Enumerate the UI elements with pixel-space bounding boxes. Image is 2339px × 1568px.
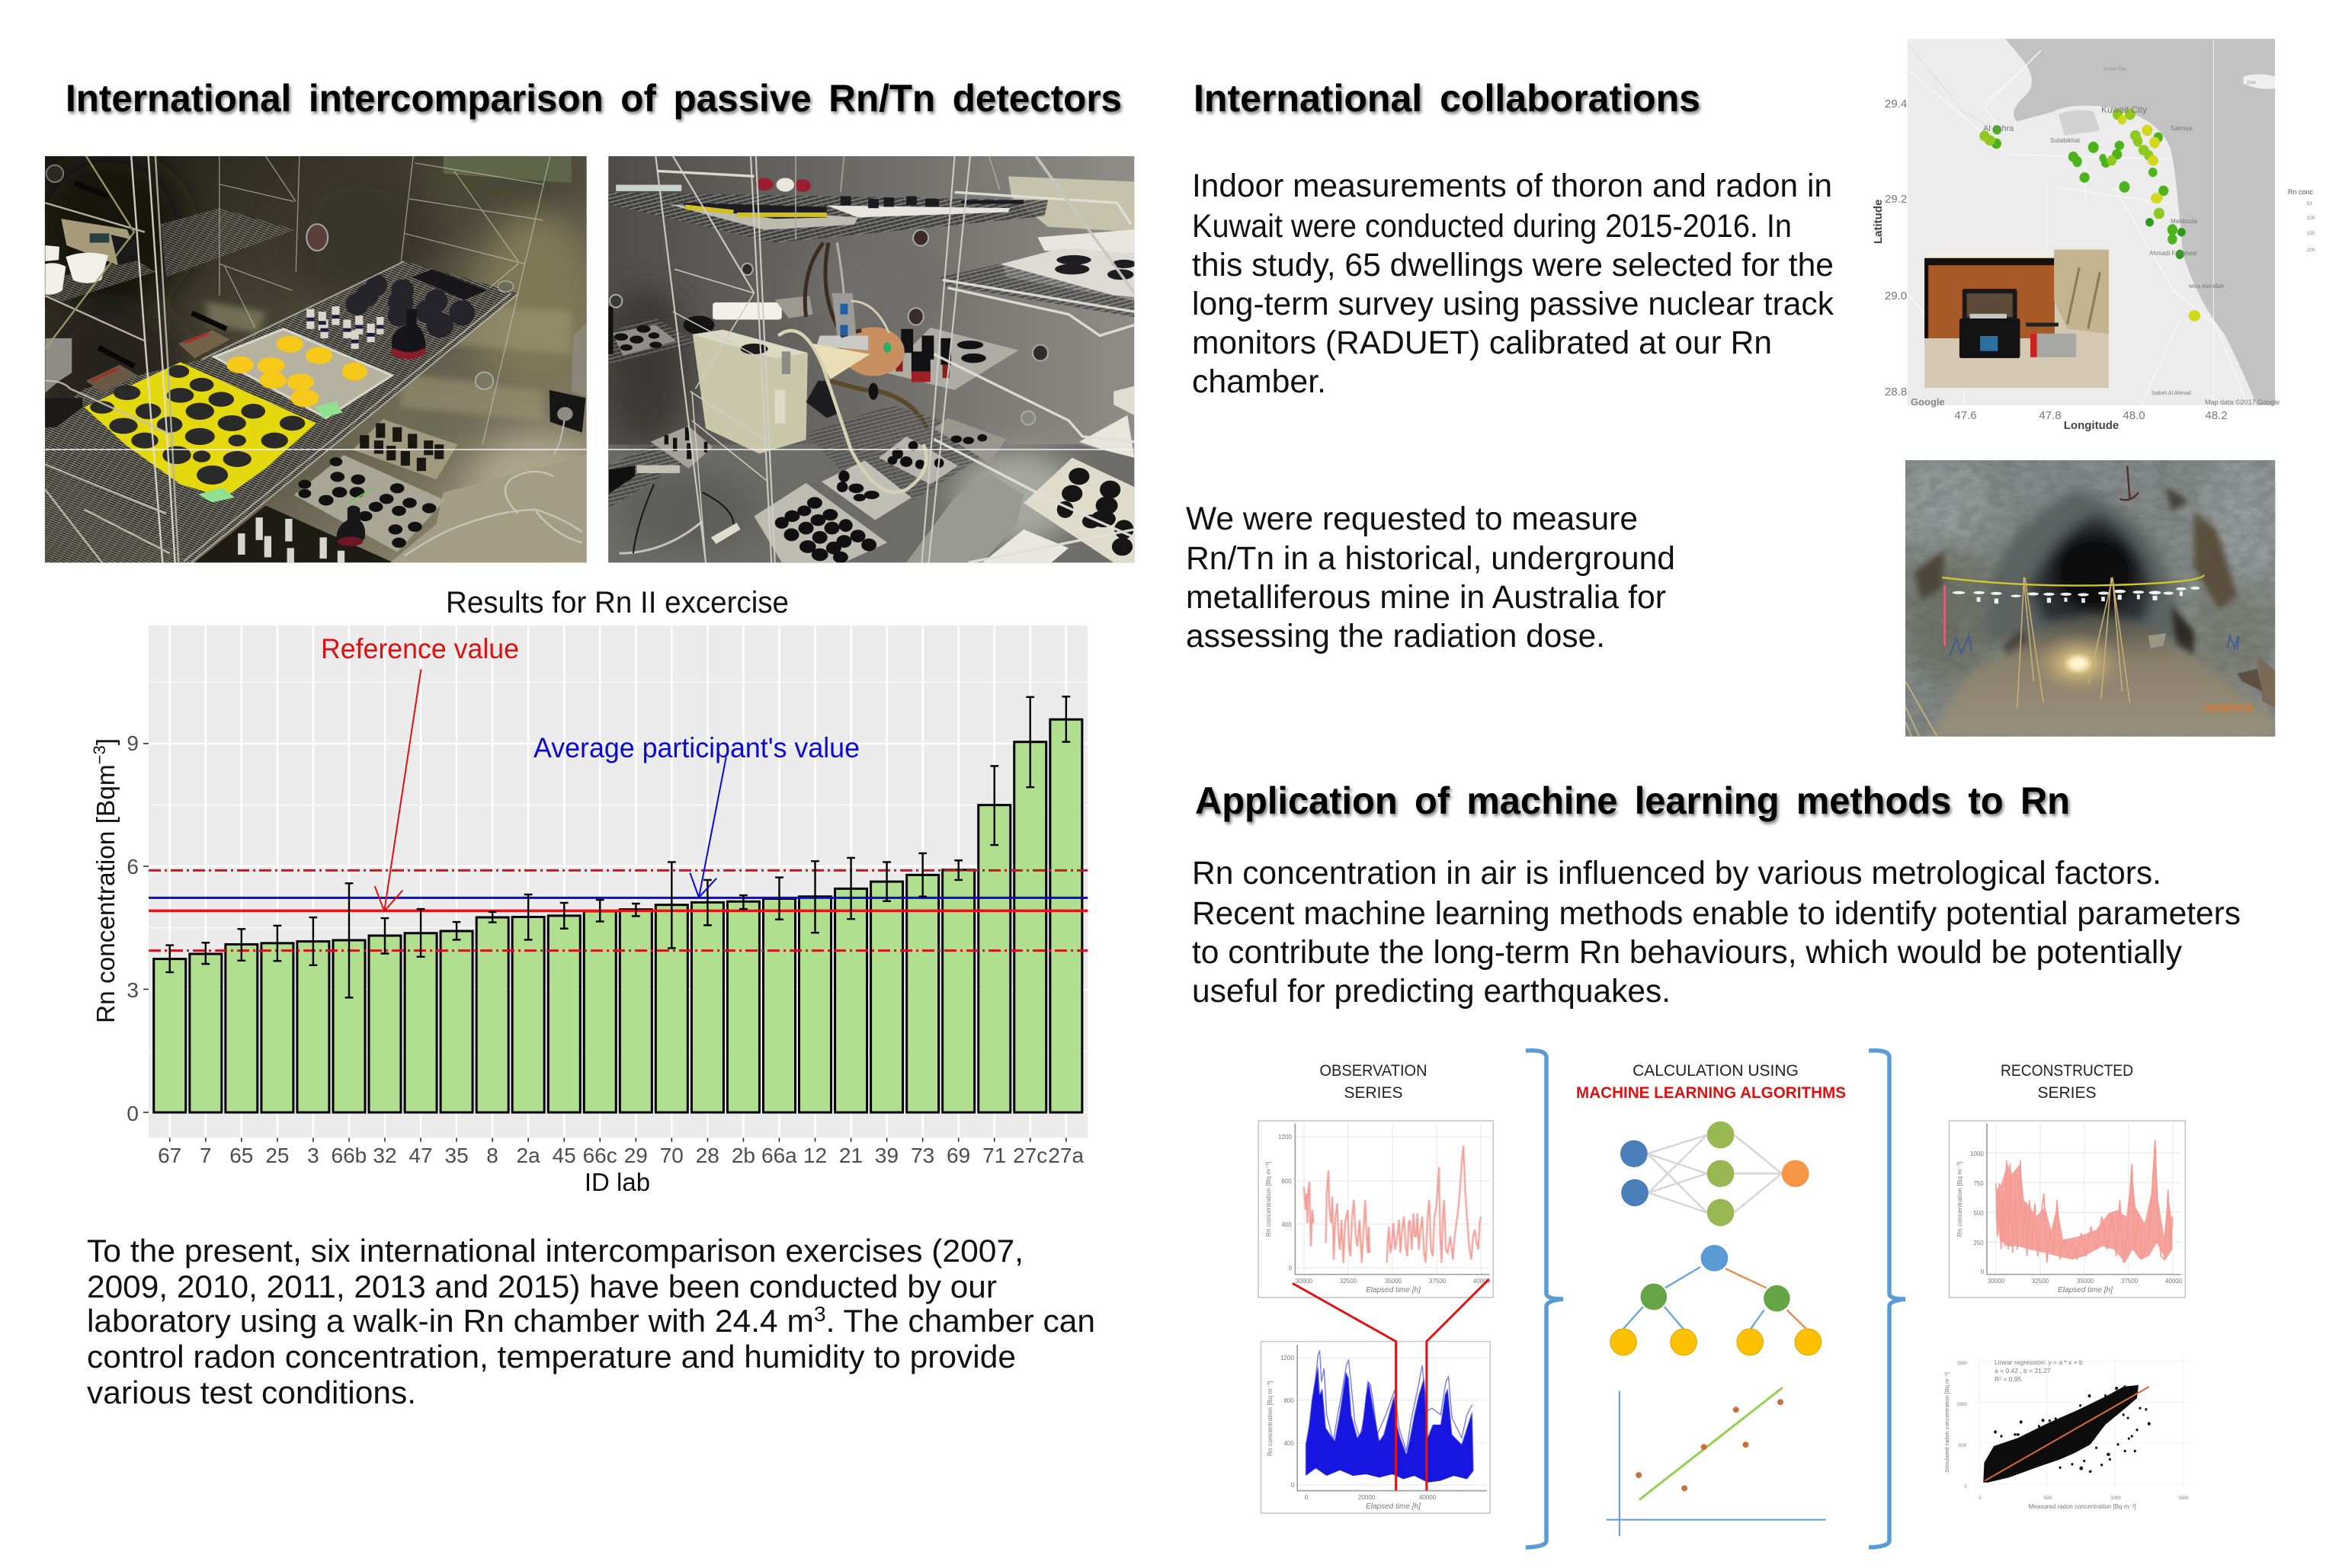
bracket right xyxy=(1869,1051,1905,1547)
x axis tick labels: 8 xyxy=(486,1144,498,1167)
white seam across photos xyxy=(45,449,1134,450)
text: mine measurement: metalliferous mine in Australia for xyxy=(1186,579,1666,616)
chart: full observed series: 0 xyxy=(1305,1494,1309,1501)
map text: 29.0 xyxy=(1885,290,1907,302)
icon: neural network xyxy=(1620,1122,1809,1226)
x axis tick labels: 70 xyxy=(660,1144,684,1167)
text: intercomparison exercises: . The chamber can xyxy=(826,1303,1095,1339)
chart: simulated vs measured scatter: 0 xyxy=(1979,1496,1982,1501)
left tray xyxy=(608,317,699,365)
chart: simulated vs measured scatter: a = 0.42 , b = 21.27 xyxy=(1995,1367,2051,1374)
map text: 53 xyxy=(2307,202,2312,206)
top shelf xyxy=(608,192,1048,242)
x axis tick labels: 66c xyxy=(583,1144,617,1167)
y axis title: Rn concentration [Bqm xyxy=(92,764,120,1023)
x axis tick labels: 3 xyxy=(307,1144,319,1167)
label: calculation using ML xyxy=(1576,1062,1846,1102)
chart: simulated vs measured scatter: 1500 xyxy=(2178,1496,2189,1501)
x axis tick labels: 27a xyxy=(1048,1144,1084,1167)
yellow passive monitors xyxy=(85,362,316,498)
label: calculation using ML: MACHINE LEARNING ALGORITHMS xyxy=(1576,1084,1846,1102)
lower vials xyxy=(238,517,344,562)
handles xyxy=(75,183,226,366)
vials xyxy=(306,306,383,349)
photo date stamp: 09/08/2016 xyxy=(2204,702,2253,714)
text: Kuwait survey: Indoor measurements of thoron and radon in xyxy=(1192,168,1832,204)
bag and boxes xyxy=(45,338,72,392)
y axis title: ] xyxy=(92,738,120,745)
text: machine learning intro: Rn concentration in air is influenced by various metrological factors. xyxy=(1192,855,2161,891)
chart: reconstructed series: 500 xyxy=(1973,1210,1984,1217)
map: Kuwait measurements xyxy=(1872,39,2315,432)
map text: Latitude xyxy=(1872,200,1885,244)
photo: detectors on chamber shelves xyxy=(24,152,607,564)
x axis tick labels: 39 xyxy=(875,1144,899,1167)
chart: simulated vs measured scatter: R² = 0.95 xyxy=(1995,1375,2021,1383)
chart: simulated vs measured scatter: 1500 xyxy=(1956,1362,1967,1366)
text: intercomparison exercises: various test conditions. xyxy=(87,1374,416,1410)
label: reconstructed series xyxy=(2001,1062,2133,1102)
chart: observed zoom series: 400 xyxy=(1281,1221,1292,1228)
text: mine measurement: Rn/Tn in a historical, underground xyxy=(1186,540,1675,577)
map text: 47.6 xyxy=(1954,409,1977,422)
chart: full observed series: 800 xyxy=(1283,1397,1294,1404)
photo: phantom head and monitors in chamber xyxy=(606,156,1136,563)
label: reconstructed series: RECONSTRUCTED xyxy=(2001,1062,2133,1080)
text: intercomparison exercises: control radon concentration, temperature and humidity to provide xyxy=(87,1339,1016,1374)
red zoom lines xyxy=(1293,1279,1489,1491)
x axis tick labels: 45 xyxy=(553,1144,576,1167)
annotation: reference value: Reference value xyxy=(321,633,519,664)
map text: Mina Abd Allah xyxy=(2189,284,2224,290)
map text: Ahmadi Fahaheel xyxy=(2149,250,2197,257)
chart: observed zoom series xyxy=(1258,1121,1493,1298)
x axis tick labels: 21 xyxy=(839,1144,863,1167)
chart: simulated vs measured scatter xyxy=(1943,1357,2193,1510)
x axis tick labels: 2b xyxy=(732,1144,755,1167)
beige radon monitor xyxy=(693,330,808,454)
chart: observed zoom series: 35000 xyxy=(1385,1278,1402,1285)
text: Kuwait survey xyxy=(1192,168,1834,400)
highlights on wall xyxy=(205,301,572,421)
bottle xyxy=(392,309,426,359)
lower wire shelves xyxy=(608,428,706,508)
text: Kuwait survey: long-term survey using passive nuclear track xyxy=(1192,286,1834,322)
chart: full observed series: 400 xyxy=(1283,1440,1294,1447)
heading: machine learning: Application of machine learning methods to Rn xyxy=(1195,779,2070,822)
chart title: Results for Rn II excercise xyxy=(446,586,789,619)
text: machine learning intro xyxy=(1192,855,2241,1010)
chart: reconstructed series: 0 xyxy=(1981,1269,1985,1275)
bar chart: Rn II results xyxy=(90,626,1088,1196)
diagram: machine learning workflow xyxy=(1258,1051,2193,1547)
floor xyxy=(608,444,1134,562)
x axis tick labels: 29 xyxy=(624,1144,648,1167)
map text: Mahboula xyxy=(2171,218,2198,225)
cables and plug left xyxy=(620,521,703,553)
map text: 48.2 xyxy=(2205,409,2228,422)
top shelf detectors xyxy=(684,203,827,219)
band xyxy=(1996,1144,2172,1262)
map text: Longitude xyxy=(2064,419,2119,432)
map text: Sulaibikhat xyxy=(2050,137,2081,144)
map text: Sabah Al Ahmad xyxy=(2152,391,2191,396)
x axis tick labels: 25 xyxy=(265,1144,289,1167)
chart: observed zoom series: 800 xyxy=(1281,1178,1292,1185)
y axis tick labels: 3 xyxy=(127,978,139,1002)
dark floor area xyxy=(194,506,393,562)
chart: reconstructed series: Rn concentration [Bq m⁻³] xyxy=(1956,1162,1963,1237)
detectors xyxy=(1953,587,2200,603)
x axis tick labels: 66b xyxy=(332,1144,367,1167)
white cups xyxy=(45,245,108,295)
lower detector trays xyxy=(879,437,958,485)
chart: observed zoom series: 37500 xyxy=(1429,1278,1447,1285)
map text: Al Jahra xyxy=(1983,124,2014,133)
rock texture xyxy=(1905,460,2275,737)
icon: decision tree xyxy=(1610,1245,1822,1355)
photo: underground mine xyxy=(1894,453,2288,740)
ports xyxy=(610,230,1048,425)
arrow: reference value xyxy=(375,669,421,911)
white bottles xyxy=(713,302,782,320)
y axis tick labels: 6 xyxy=(127,855,139,878)
text: Kuwait survey: this study, 65 dwellings were selected for the xyxy=(1192,247,1834,283)
x axis tick labels: 12 xyxy=(803,1144,827,1167)
chart: full observed series: 1200 xyxy=(1280,1355,1294,1362)
chart: reconstructed series: 37500 xyxy=(2121,1278,2139,1285)
grey tray with black dots xyxy=(294,455,445,552)
bracket left xyxy=(1526,1051,1563,1547)
text: machine learning intro: to contribute the long-term Rn behaviours, which would be potentially xyxy=(1192,934,2182,971)
red and white balls xyxy=(755,178,811,192)
error bars xyxy=(165,696,1070,997)
map text: Map data ©2017 Google xyxy=(2205,398,2280,406)
y axis tick labels: 9 xyxy=(127,731,139,755)
map text: Google xyxy=(1911,396,1945,408)
text: Kuwait survey: monitors (RADUET) calibrated at our Rn xyxy=(1192,325,1772,361)
label: observation series: SERIES xyxy=(1344,1084,1403,1102)
heading: international collaborations: International collaborations xyxy=(1194,77,1700,120)
map text: Salmiya xyxy=(2171,125,2193,132)
text: intercomparison exercises: To the present, six international intercomparison exercises (2007, xyxy=(87,1233,1024,1269)
shelves xyxy=(161,208,295,277)
map text: 29.4 xyxy=(1885,98,1907,110)
hoses xyxy=(805,242,861,335)
map text: Kuwait Bay xyxy=(2103,67,2126,72)
map text: 150 xyxy=(2307,232,2315,236)
chart: reconstructed series: 40000 xyxy=(2165,1278,2183,1285)
map text: 105 xyxy=(2307,216,2315,221)
chart: full observed series: 0 xyxy=(1291,1482,1295,1489)
chart: reconstructed series: 35000 xyxy=(2077,1278,2094,1285)
wire frames xyxy=(45,156,178,562)
white trays right xyxy=(1037,229,1134,253)
map text: Kuwait City xyxy=(2101,104,2147,115)
instrument xyxy=(61,219,139,265)
chart: reconstructed series: Elapsed time [h] xyxy=(2058,1286,2113,1294)
map text xyxy=(1872,67,2315,432)
cables xyxy=(404,472,582,556)
text: Kuwait survey: chamber. xyxy=(1192,363,1326,400)
x axis tick labels: 7 xyxy=(200,1144,212,1167)
text: mine measurement: assessing the radiation dose. xyxy=(1186,618,1605,654)
chart: reconstructed series: 1000 xyxy=(1970,1150,1984,1157)
chart: reconstructed series: 750 xyxy=(1973,1180,1984,1187)
window top right xyxy=(1008,176,1134,232)
label: observation series xyxy=(1320,1062,1427,1102)
chart: simulated vs measured scatter: Simulated radon concentration [Bq m⁻³] xyxy=(1943,1372,1950,1473)
stand xyxy=(806,381,841,418)
text: machine learning intro: Recent machine learning methods enable to identify potential parameters xyxy=(1192,895,2241,932)
chart: simulated vs measured scatter: 500 xyxy=(2044,1496,2052,1501)
map text: 47.8 xyxy=(2039,409,2062,422)
x axis tick labels: 69 xyxy=(947,1144,970,1167)
x axis tick labels: 28 xyxy=(696,1144,719,1167)
chart: full observed series: 40000 xyxy=(1419,1494,1437,1501)
text: machine learning intro: useful for predicting earthquakes. xyxy=(1192,973,1671,1010)
x axis tick labels: 71 xyxy=(982,1144,1006,1167)
chart: full observed series: Elapsed time [h] xyxy=(1366,1502,1421,1511)
x axis tick labels: 27c xyxy=(1013,1144,1047,1167)
chart: simulated vs measured scatter: Measured radon concentration [Bq m⁻³] xyxy=(2029,1503,2136,1510)
map text: 48.0 xyxy=(2123,409,2145,422)
text: intercomparison exercises xyxy=(87,1233,1095,1410)
x axis tick labels: 2a xyxy=(517,1144,540,1167)
vial tray xyxy=(353,419,457,479)
legend dots xyxy=(2286,197,2301,254)
icon: linear regression xyxy=(1607,1387,1825,1536)
x axis tick labels: 67 xyxy=(158,1144,181,1167)
inset photo: monitors xyxy=(1924,250,2109,388)
mine floor xyxy=(1930,616,2278,740)
text: intercomparison exercises: 3 xyxy=(814,1302,826,1326)
tubing xyxy=(778,331,926,492)
chart: reconstructed series xyxy=(1950,1121,2185,1298)
x axis tick labels xyxy=(158,1144,1084,1167)
chart: observed zoom series: 30000 xyxy=(1296,1278,1313,1285)
silver tray with yellow balls xyxy=(214,329,392,418)
reference lines xyxy=(149,870,1088,951)
y axis tick labels: 0 xyxy=(127,1102,139,1125)
text: intercomparison exercises: 2009, 2010, 2011, 2013 and 2015) have been conducted by our xyxy=(87,1269,997,1304)
map text: 28.8 xyxy=(1885,386,1907,398)
chart: observed zoom series: 1200 xyxy=(1278,1134,1292,1141)
chart: reconstructed series: 250 xyxy=(1973,1240,1984,1246)
floor right xyxy=(390,455,587,562)
bars xyxy=(154,719,1082,1112)
y axis tick labels xyxy=(127,731,139,1125)
connector plate xyxy=(550,390,585,433)
chart: reconstructed series: 32500 xyxy=(2032,1278,2049,1285)
rope xyxy=(1942,575,2204,586)
window top right xyxy=(444,156,572,183)
label: reconstructed series: SERIES xyxy=(2037,1084,2097,1102)
annotation: average participant value: Average participant's value xyxy=(533,732,860,763)
sticks xyxy=(2017,578,2129,708)
chart: simulated vs measured scatter: 0 xyxy=(1964,1485,1967,1490)
x axis tick labels: 66a xyxy=(761,1144,797,1167)
text: Kuwait survey: Kuwait were conducted during 2015-2016. In xyxy=(1192,208,1792,245)
chart: full observed series: Rn concentration [Bq m⁻³] xyxy=(1266,1381,1274,1456)
right wire shelf xyxy=(940,264,1134,317)
chart: observed zoom series: 0 xyxy=(1289,1265,1293,1272)
chart: observed zoom series: 40000 xyxy=(1473,1278,1491,1285)
chart: simulated vs measured scatter: 1000 xyxy=(2110,1496,2121,1501)
chart: full observed series: 20000 xyxy=(1358,1494,1376,1501)
right tray with bottles xyxy=(886,328,1018,390)
x axis title: ID lab xyxy=(585,1168,650,1196)
heading: intercomparison: International intercomparison of passive Rn/Tn detectors xyxy=(66,77,1122,120)
phantom head xyxy=(842,327,905,376)
x axis tick labels: 65 xyxy=(229,1144,253,1167)
map text: Rn conc xyxy=(2288,188,2314,196)
text: mine measurement: We were requested to measure xyxy=(1186,501,1638,537)
x axis tick labels: 32 xyxy=(373,1144,397,1167)
hook xyxy=(2120,466,2139,500)
x axis tick labels: 35 xyxy=(445,1144,469,1167)
ports xyxy=(306,224,328,251)
map base xyxy=(1908,39,2301,405)
chart: simulated vs measured scatter: Linear regression: y = a * x + b xyxy=(1995,1358,2083,1366)
arrow: average value xyxy=(690,757,726,898)
x axis tick labels: 47 xyxy=(409,1144,433,1167)
chart: observed zoom series: Elapsed time [h] xyxy=(1366,1286,1421,1294)
y axis title: −3 xyxy=(90,745,109,764)
chart: full observed series xyxy=(1261,1279,1490,1513)
chart: observed zoom series: 32500 xyxy=(1340,1278,1357,1285)
map text: Zoor xyxy=(2247,81,2256,85)
chart: simulated vs measured scatter: 1000 xyxy=(1956,1403,1967,1407)
tunnel depth xyxy=(1985,489,2181,641)
dark egg detectors xyxy=(346,274,475,338)
label: observation series: OBSERVATION xyxy=(1320,1062,1427,1080)
text: intercomparison exercises: laboratory using a walk-in Rn chamber with 24.4 m xyxy=(87,1303,806,1339)
map text: 29.2 xyxy=(1885,193,1907,206)
chart: simulated vs measured scatter: 500 xyxy=(1959,1444,1967,1448)
chart: observed zoom series: Rn concentration [Bq m⁻³] xyxy=(1264,1162,1272,1237)
chart: reconstructed series: 30000 xyxy=(1988,1278,2005,1285)
x axis tick labels: 73 xyxy=(911,1144,934,1167)
brown rock seams xyxy=(1914,486,2237,661)
dots xyxy=(1979,109,2200,322)
label: calculation using ML: CALCULATION USING xyxy=(1632,1062,1799,1080)
wire frames xyxy=(655,156,1134,562)
silver floor panels xyxy=(906,474,1024,562)
axis ticks xyxy=(143,744,1066,1142)
text: mine measurement xyxy=(1186,501,1675,654)
map text: 200 xyxy=(2307,248,2315,253)
plot area xyxy=(143,626,1088,1142)
